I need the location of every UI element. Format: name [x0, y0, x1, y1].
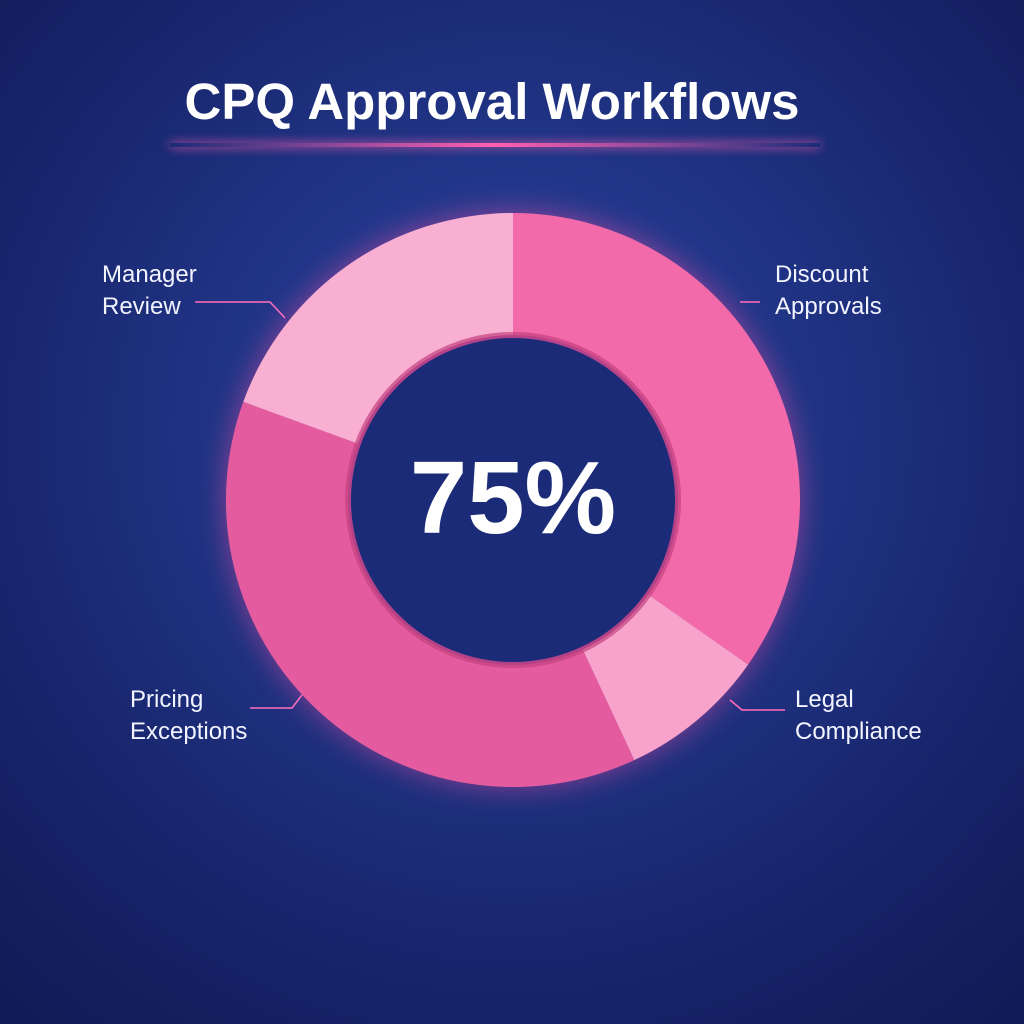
label: Pricing Exceptions: Exceptions [130, 718, 247, 745]
label: Manager Review: Manager [102, 261, 197, 288]
label: Manager Review: Review [102, 293, 181, 320]
center value: 75% [410, 440, 616, 555]
label: Legal Compliance: Compliance [795, 718, 922, 745]
label: Pricing Exceptions [130, 686, 247, 745]
title: CPQ Approval Workflows [185, 73, 799, 130]
segment: Manager Review [243, 213, 513, 444]
segment: Pricing Exceptions [226, 402, 634, 787]
label: Legal Compliance [795, 686, 922, 745]
label: Pricing Exceptions: Pricing [130, 686, 203, 713]
label: Manager Review [102, 261, 197, 320]
segment: Legal Compliance [583, 595, 748, 760]
connector lines [195, 302, 785, 710]
label: Discount Approvals: Approvals [775, 293, 882, 320]
label: Legal Compliance: Legal [795, 686, 854, 713]
segment: Discount Approvals [513, 213, 800, 665]
label: Discount Approvals: Discount [775, 261, 868, 288]
title underline glow [170, 143, 820, 147]
label: Discount Approvals [775, 261, 882, 320]
